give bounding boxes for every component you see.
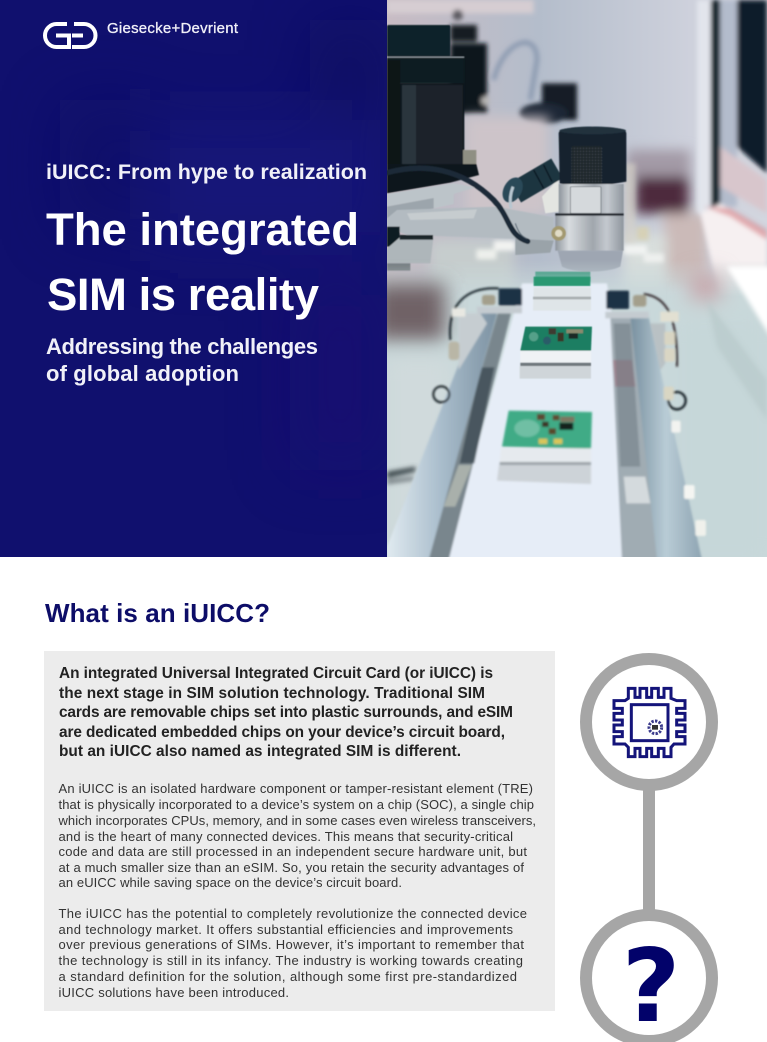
body paragraph 2: the technology is still in its infancy. The industry is working towards creating bbox=[58, 953, 523, 968]
connector: line between icon circles bbox=[643, 788, 655, 912]
body paragraph 2: a standard definition for the solution, although some first pre-standardized bbox=[58, 969, 517, 984]
lead paragraph: the next stage in SIM solution technology. Traditional SIM bbox=[59, 685, 485, 702]
icon: microchip with gear bbox=[614, 688, 685, 757]
lead paragraph: An integrated Universal Integrated Circuit Card (or iUICC) is bbox=[59, 665, 493, 682]
body paragraph 2: The iUICC has the potential to completely revolutionize the connected device bbox=[58, 906, 527, 921]
studs bbox=[671, 421, 681, 433]
body paragraph 2: iUICC solutions have been introduced. bbox=[58, 985, 289, 1000]
photo lower half: conveyor belt with boards bbox=[374, 260, 767, 563]
icon: question mark: ? bbox=[622, 927, 680, 1042]
body paragraph 1: an eUICC while saving space on the device’s circuit board. bbox=[58, 875, 402, 890]
photo: circuit boards on a production conveyor bbox=[374, 0, 767, 563]
logo wordmark: Giesecke+Devrient bbox=[107, 20, 239, 37]
body paragraph 2 bbox=[58, 906, 527, 1000]
logo: Giesecke+Devrient bbox=[45, 20, 239, 47]
subtitle: of global adoption bbox=[46, 361, 239, 386]
body paragraph 1: at a much smaller size than an eSIM. So, you retain the security advantages of bbox=[58, 860, 524, 875]
lead paragraph: are dedicated embedded chips on your device’s circuit board, bbox=[59, 724, 505, 741]
motor block bbox=[387, 25, 450, 57]
body paragraph 1: An iUICC is an isolated hardware component or tamper-resistant element (TRE) bbox=[58, 781, 533, 796]
photo upper half: camera and machinery bbox=[387, 0, 767, 290]
body paragraph 1: and is the heart of many connected devices. This means that security-critical bbox=[58, 829, 513, 844]
main title: The integrated bbox=[46, 204, 359, 255]
bracket by camera bbox=[542, 178, 559, 213]
rail mounts bbox=[459, 313, 487, 370]
cover titles bbox=[46, 160, 367, 386]
lead paragraph bbox=[59, 665, 513, 760]
body paragraph 1: code and data are still processed in an independent secure hardware unit, but bbox=[58, 844, 527, 859]
body paragraph 2: and technology market. It offers substantial efficiencies and improvements bbox=[58, 922, 514, 937]
subtitle bbox=[46, 334, 318, 386]
side connector bbox=[515, 168, 557, 193]
panel: definition text box bbox=[44, 651, 555, 1011]
overline: iUICC: From hype to realization bbox=[46, 160, 367, 184]
lead paragraph: cards are removable chips set into plastic surrounds, and eSIM bbox=[59, 704, 513, 721]
main title bbox=[46, 204, 359, 320]
subtitle: Addressing the challenges bbox=[46, 334, 318, 359]
top board bbox=[534, 277, 590, 286]
cables bbox=[450, 288, 499, 340]
right rail and gap bbox=[610, 317, 659, 560]
camera head bbox=[559, 127, 626, 186]
icon circle: question mark bbox=[586, 915, 712, 1042]
main title: SIM is reality bbox=[47, 269, 320, 320]
body paragraph 1 bbox=[58, 781, 536, 890]
belt bbox=[448, 282, 623, 557]
lead paragraph: but an iUICC also named as integrated SIM is different. bbox=[59, 743, 461, 760]
middle board bbox=[520, 327, 592, 351]
body paragraph 1: that is physically incorporated to a device’s system on a chip (SOC), a single chip bbox=[58, 797, 534, 812]
body paragraph 1: which incorporates CPUs, memory, and in some cases even wireless transceivers, bbox=[58, 813, 536, 828]
top board partial bbox=[535, 272, 590, 282]
icon circle: chip bbox=[586, 659, 712, 785]
icon: G+D symbol bbox=[45, 24, 96, 47]
front board bbox=[502, 411, 592, 449]
body paragraph 2: over previous generations of SIMs. However, it’s important to remember that bbox=[58, 937, 524, 952]
cable bbox=[387, 168, 528, 241]
heading: What is an iUICC?: What is an iUICC? bbox=[45, 598, 270, 628]
panel: navy cover background bbox=[0, 0, 390, 557]
left rail and gap bbox=[427, 313, 511, 560]
